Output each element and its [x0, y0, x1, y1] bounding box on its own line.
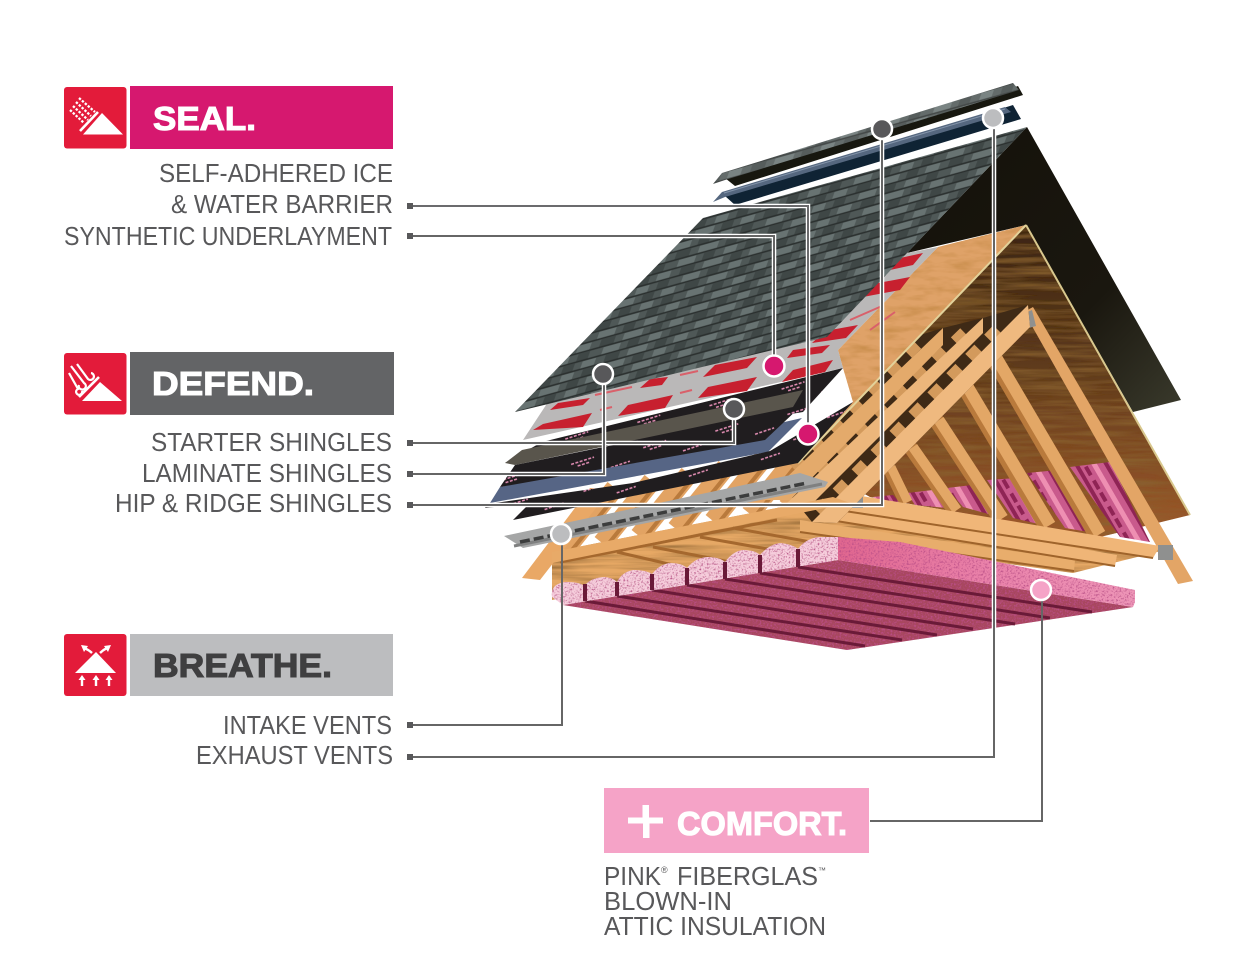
defend banner: DEFEND.: [152, 365, 314, 402]
panel: defend heading: [64, 352, 394, 415]
icon: plus: [628, 805, 663, 838]
leader: laminate shingles: [407, 364, 613, 477]
icon: roof ventilation arrows: [64, 634, 126, 696]
text: self-adhered ice and water barrier: SELF-ADHERED ICE: [159, 158, 393, 188]
pink insulation baffles: [873, 462, 1150, 542]
leader: comfort insulation: [870, 580, 1051, 821]
breathe banner: [130, 634, 393, 696]
text: starter shingles: STARTER SHINGLES: [151, 427, 392, 457]
rafter: [763, 328, 943, 500]
seal banner: SEAL.: [153, 100, 256, 137]
starter shingle strip: [505, 390, 803, 465]
text: self-adhered ice and water barrier: & WATER BARRIER: [171, 189, 393, 219]
icon: wind on roof: [64, 353, 126, 414]
blown-in insulation: [552, 537, 1135, 650]
leader: hip and ridge shingles: [407, 119, 892, 508]
roof cutaway illustration: [485, 83, 1193, 650]
text: hip and ridge shingles: HIP & RIDGE SHINGLES: [115, 488, 392, 518]
text: intake vents: INTAKE VENTS: [223, 710, 392, 740]
seal banner: [130, 86, 393, 149]
ice and water barrier top sheet: [505, 368, 843, 463]
lower rafter ends: [522, 445, 860, 580]
text: exhaust vents: EXHAUST VENTS: [196, 740, 393, 770]
breathe banner: BREATHE.: [153, 647, 332, 684]
defend banner: [130, 352, 394, 415]
text: pink fiberglas blown-in attic insulation: PINK: [604, 861, 662, 891]
truss right leg: [1024, 307, 1193, 584]
text: pink fiberglas blown-in attic insulation: ™: [818, 866, 826, 875]
text: pink fiberglas blown-in attic insulation: BLOWN-IN: [604, 886, 732, 916]
leader: intake vents: [407, 524, 571, 728]
tie beams: [800, 492, 1160, 571]
back wood sheathing: [800, 225, 1190, 537]
ridge vent strip: [713, 105, 1021, 205]
text: laminate shingles: LAMINATE SHINGLES: [142, 458, 392, 488]
black shingle sheet: [500, 407, 800, 487]
text: pink fiberglas blown-in attic insulation: FIBERGLAS: [677, 861, 818, 891]
truss left leg: [812, 305, 1030, 523]
text: self-adhered ice and water barrier: [159, 158, 393, 219]
upper rafters and purlins: [763, 305, 1030, 523]
osb roof sheathing: [798, 225, 1026, 463]
intake vent: [504, 473, 828, 548]
plate beam: [552, 497, 850, 563]
truss webs: [888, 352, 1100, 534]
comfort title: COMFORT.: [677, 805, 847, 842]
text: pink fiberglas blown-in attic insulation: ATTIC INSULATION: [604, 911, 826, 941]
blue membrane: [490, 418, 802, 503]
synthetic underlayment layer: [523, 247, 938, 440]
black back of roof deck: [907, 127, 1181, 412]
barcode labels: [848, 310, 1173, 560]
panel: breathe heading: [64, 634, 393, 696]
leader: exhaust vents: [407, 108, 1003, 760]
ceiling joist deck: [552, 497, 1165, 600]
rafter: [787, 318, 983, 503]
icon: rain on roof: [64, 87, 126, 148]
laminate shingle field: [515, 127, 1027, 412]
ridge cap shingle: [713, 83, 1023, 186]
leader: synthetic underlayment: [407, 233, 784, 376]
text: pink fiberglas blown-in attic insulation: ®: [661, 865, 668, 875]
text: pink fiberglas blown-in attic insulation: [604, 861, 826, 941]
leader: self-adhered ice and water barrier: [407, 203, 818, 444]
leader: starter shingles: [407, 399, 744, 446]
text: synthetic underlayment: SYNTHETIC UNDERLAYMENT: [64, 221, 392, 251]
panel: seal heading: [64, 86, 393, 149]
lower barrier sheet: [485, 402, 853, 520]
panel: comfort heading: [604, 788, 869, 853]
